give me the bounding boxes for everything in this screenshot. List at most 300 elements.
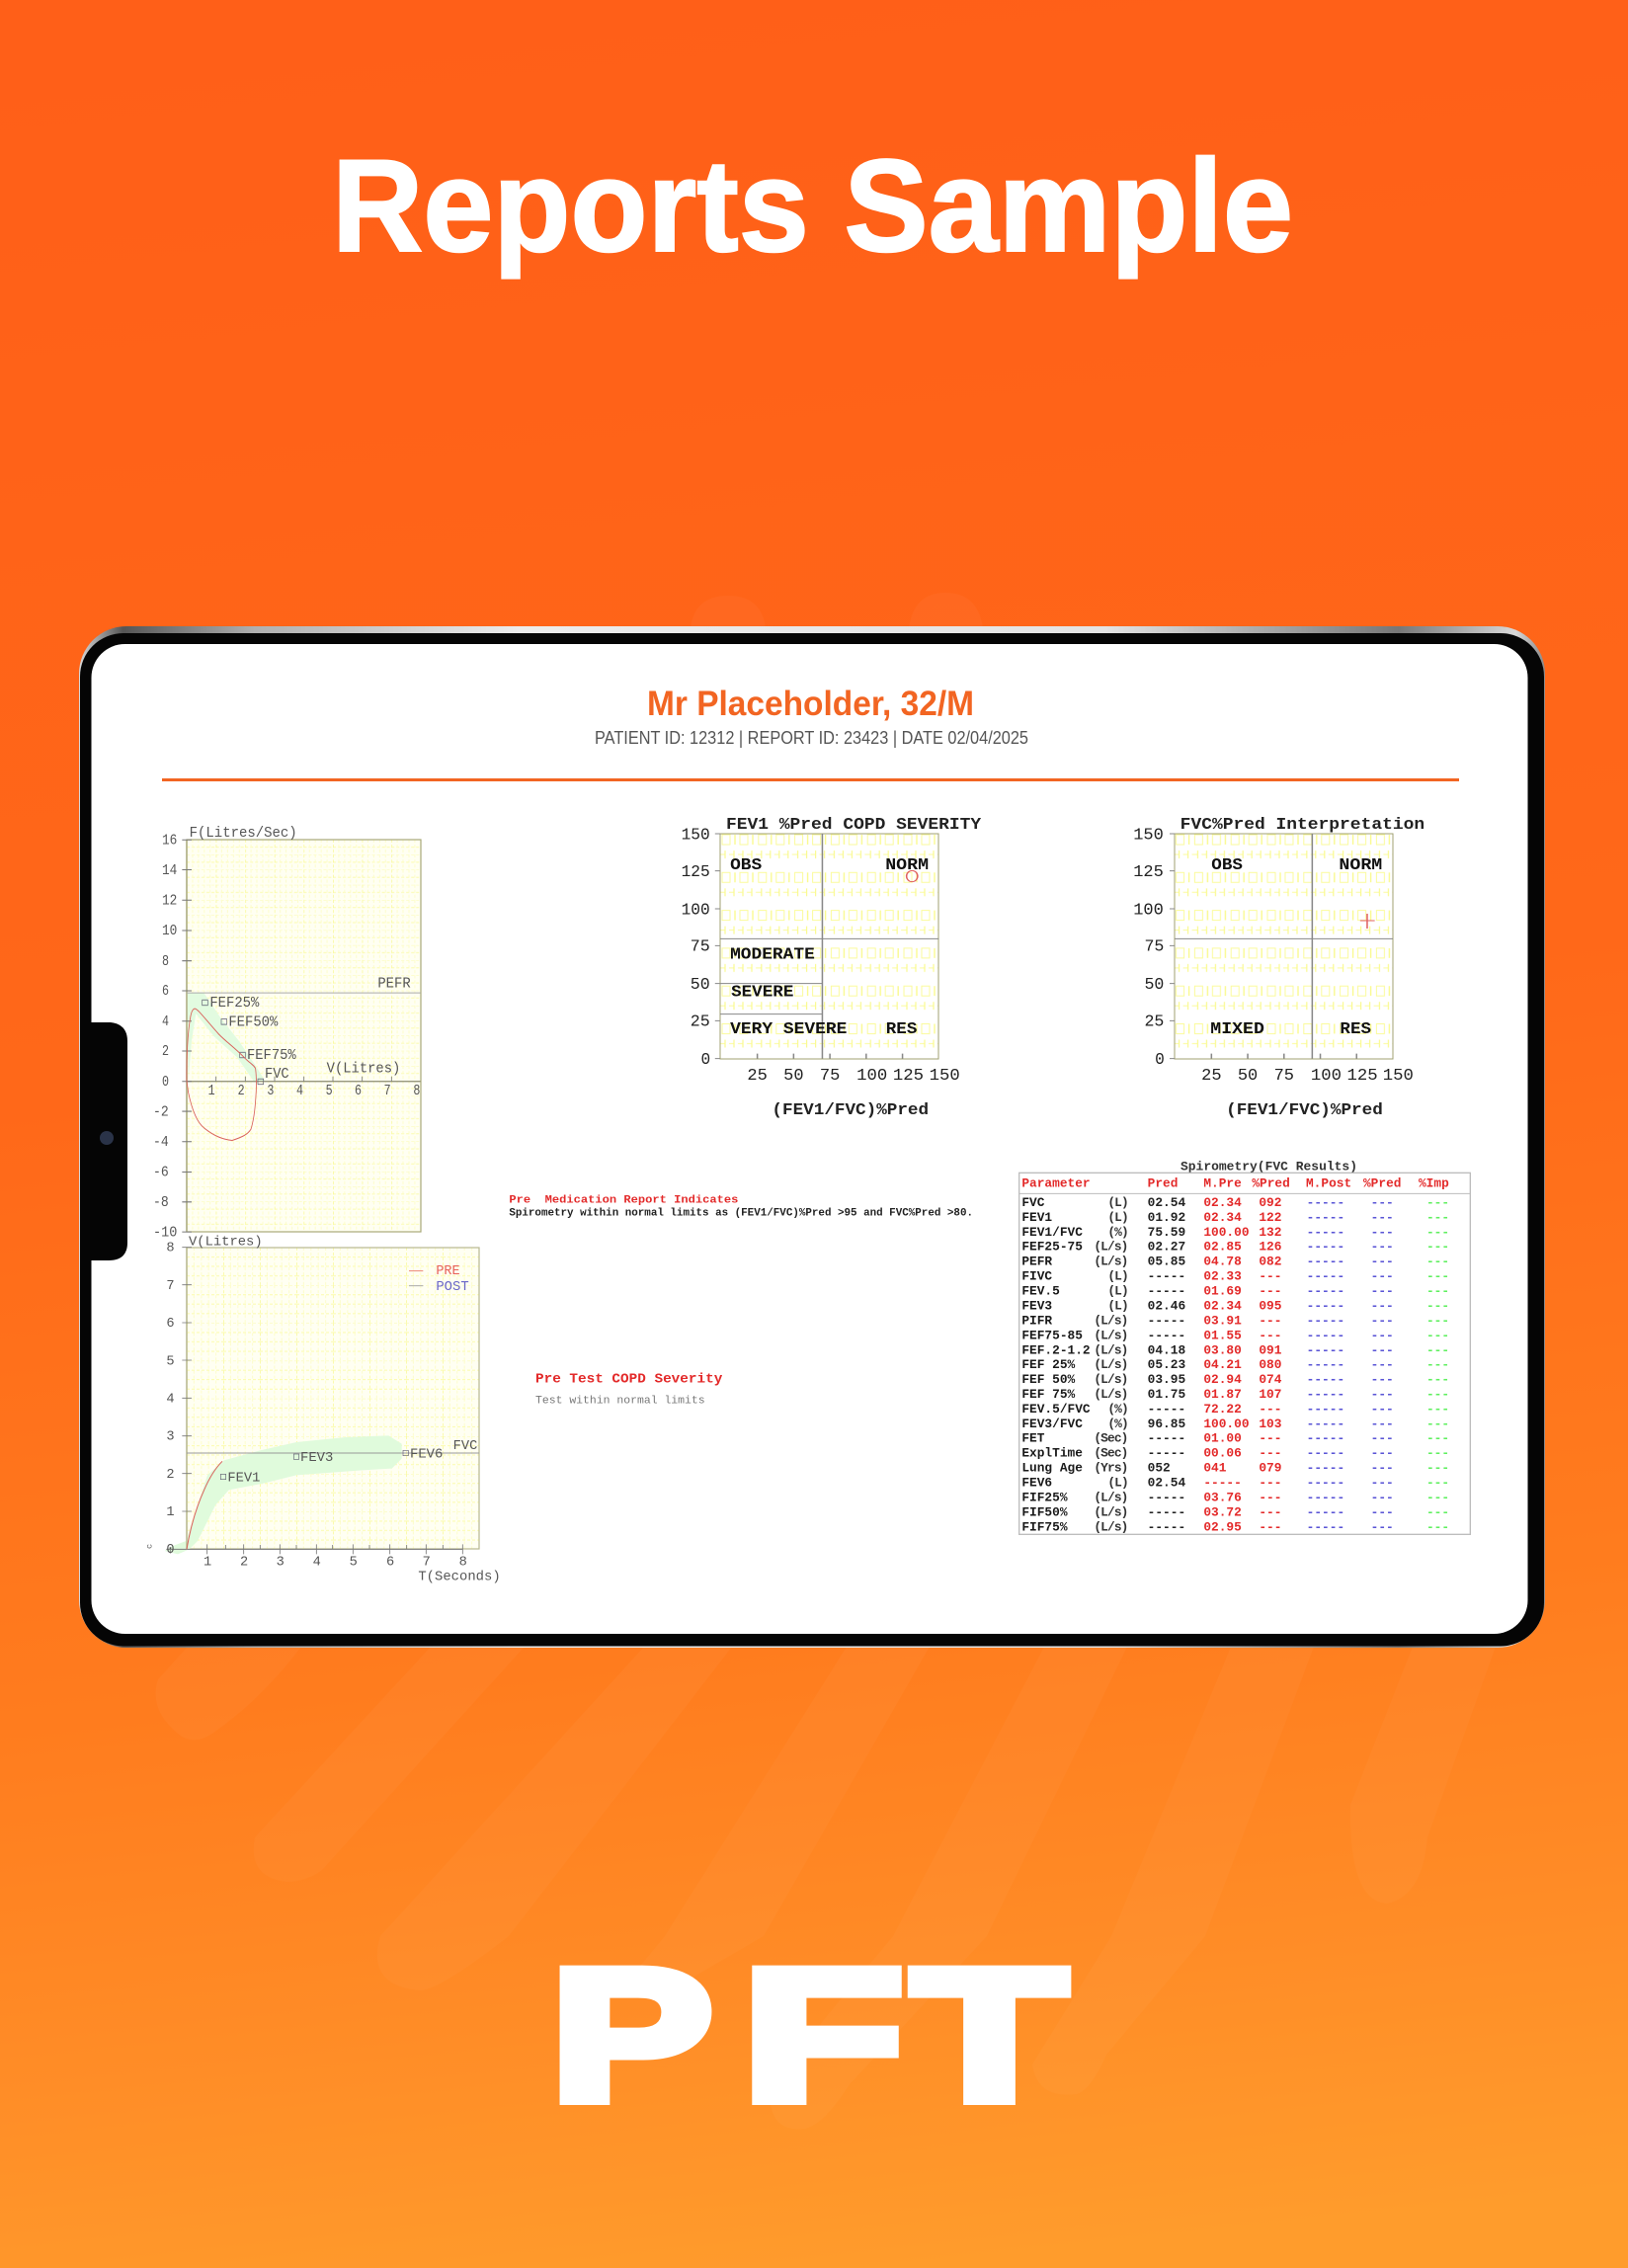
row FIF50%: --- — [1371, 1504, 1394, 1519]
interpretation x-axis title: (FEV1/FVC)%Pred — [1226, 1101, 1383, 1119]
flow x-axis labels: 8 — [413, 1083, 420, 1098]
flow-volume loop curve — [187, 1009, 256, 1141]
stray rotated glyph: c — [144, 1544, 154, 1549]
row FEF 25%: 04.21 — [1203, 1357, 1242, 1372]
interpretation y-axis labels: 50 — [1144, 976, 1164, 994]
row FEF25-75: (L/s) — [1094, 1240, 1128, 1255]
row FIF50%: ----- — [1148, 1504, 1185, 1519]
tablet chrome frame — [79, 626, 1545, 1648]
FEF75 marker: FEF75% — [247, 1047, 296, 1063]
flow y-axis labels: 6 — [162, 983, 169, 1000]
row FET: ----- — [1148, 1431, 1185, 1446]
interpretation region labels — [1210, 856, 1382, 1038]
row ExplTime: ----- — [1307, 1446, 1344, 1461]
row FIF25%: (L/s) — [1094, 1490, 1128, 1504]
volume y-axis labels: 2 — [166, 1468, 175, 1483]
row Lung Age: 079 — [1259, 1461, 1281, 1476]
flow y-axis labels: 16 — [162, 832, 177, 849]
row Lung Age: 041 — [1203, 1461, 1227, 1476]
volume axis title: V(Litres) — [189, 1235, 263, 1250]
severity region labels: OBS — [730, 856, 762, 874]
row FEV1: 02.34 — [1203, 1210, 1242, 1225]
severity region labels: MODERATE — [730, 945, 815, 964]
legend POST: POST — [436, 1280, 469, 1295]
interpretation y-axis labels: 125 — [1133, 863, 1164, 881]
PFT wordmark — [551, 1931, 1066, 2139]
volume y-axis labels: 8 — [166, 1242, 175, 1256]
row FEV.5/FVC: (%) — [1107, 1402, 1128, 1417]
row FEF75-85: ----- — [1307, 1328, 1344, 1342]
row FIF25%: FIF25% — [1021, 1490, 1068, 1504]
row FEF 50%: --- — [1371, 1372, 1394, 1387]
row FIF25%: --- — [1371, 1490, 1394, 1504]
row FEF 50%: FEF 50% — [1021, 1372, 1076, 1387]
severity y-axis labels: 50 — [691, 976, 710, 994]
row FET: (Sec) — [1094, 1431, 1128, 1446]
row FIVC: FIVC — [1021, 1269, 1052, 1284]
row ExplTime: 00.06 — [1203, 1446, 1242, 1461]
row FVC: --- — [1371, 1195, 1394, 1210]
row FIVC: (L) — [1107, 1269, 1128, 1284]
tablet black bezel — [80, 633, 1544, 1646]
flow x-axis labels: 1 — [208, 1083, 215, 1098]
volume y-axis labels: 5 — [166, 1354, 175, 1369]
interpretation y-axis labels: 150 — [1133, 826, 1164, 845]
row FEF 25%: 080 — [1259, 1357, 1281, 1372]
row FET: --- — [1426, 1431, 1449, 1446]
interpretation y-axis labels: 0 — [1155, 1051, 1165, 1069]
row FET: FET — [1021, 1431, 1045, 1446]
severity region labels: SEVERE — [731, 983, 793, 1002]
COPD severity text: Test within normal limits — [535, 1395, 705, 1407]
row FEF75-85: --- — [1259, 1328, 1281, 1342]
row FVC: 02.54 — [1148, 1195, 1185, 1210]
row FET: 01.00 — [1203, 1431, 1242, 1446]
row FEF25-75: --- — [1426, 1240, 1449, 1255]
flow y-axis labels: -10 — [153, 1225, 177, 1241]
row FVC: 02.34 — [1203, 1195, 1242, 1210]
FEF25 marker: FEF25% — [209, 995, 259, 1011]
severity y-axis labels: 25 — [691, 1013, 710, 1031]
row FIF75%: (L/s) — [1094, 1519, 1128, 1534]
row FIVC: --- — [1371, 1269, 1394, 1284]
volume y-axis labels: 1 — [166, 1505, 175, 1520]
severity y-axis labels: 75 — [691, 938, 710, 956]
row FEV1/FVC: --- — [1426, 1225, 1449, 1240]
flow y-axis labels: 10 — [162, 923, 177, 939]
title: Reports Sample — [332, 133, 1293, 280]
legend PRE: PRE — [436, 1264, 460, 1279]
time x-axis labels — [204, 1556, 467, 1571]
row FEV.5/FVC: --- — [1426, 1402, 1449, 1417]
table header: Parameter — [1021, 1176, 1091, 1191]
row FEV3/FVC: --- — [1426, 1417, 1449, 1431]
row PIFR: PIFR — [1021, 1313, 1052, 1328]
row FET: --- — [1371, 1431, 1394, 1446]
row FEV.5/FVC: FEV.5/FVC — [1021, 1402, 1091, 1417]
flow y-axis labels: 8 — [162, 953, 169, 969]
severity x-axis labels: 100 — [856, 1067, 887, 1085]
row FIF25%: 03.76 — [1203, 1490, 1242, 1504]
flow x-axis labels: 2 — [238, 1083, 245, 1098]
row FEF75-85: FEF75-85 — [1021, 1328, 1083, 1342]
row FEV.5/FVC: --- — [1371, 1402, 1394, 1417]
row PEFR: 05.85 — [1148, 1255, 1185, 1269]
row FEF 75%: ----- — [1307, 1387, 1344, 1402]
row FEF 75%: 01.87 — [1203, 1387, 1242, 1402]
row FEF.2-1.2: --- — [1371, 1342, 1394, 1357]
row PEFR: ----- — [1307, 1255, 1344, 1269]
interpretation labels and markers — [1133, 816, 1424, 1119]
row FEF 75%: --- — [1371, 1387, 1394, 1402]
row FIF25%: --- — [1426, 1490, 1449, 1504]
row FEV3/FVC: 103 — [1259, 1417, 1282, 1431]
row FEF 50%: (L/s) — [1094, 1372, 1128, 1387]
report header rule — [162, 778, 1459, 781]
table header: M.Post — [1306, 1176, 1351, 1191]
flow axis title: F(Litres/Sec) — [190, 825, 297, 841]
row FVC: FVC — [1021, 1195, 1045, 1210]
row FEV.5: ----- — [1307, 1284, 1344, 1299]
interpretation y-axis labels: 75 — [1144, 938, 1164, 956]
severity region labels — [730, 856, 929, 1038]
flow x-axis labels: 4 — [296, 1083, 303, 1098]
row FEF 25%: 05.23 — [1148, 1357, 1185, 1372]
row PIFR: ----- — [1148, 1313, 1185, 1328]
row FEV3/FVC: 100.00 — [1203, 1417, 1250, 1431]
row FIF75%: FIF75% — [1021, 1519, 1068, 1534]
row FEF.2-1.2: (L/s) — [1094, 1342, 1128, 1357]
row FEF25-75: FEF25-75 — [1021, 1240, 1083, 1255]
interpretation region labels: NORM — [1339, 856, 1382, 874]
severity y-axis labels: 100 — [682, 901, 710, 920]
row FEV3: FEV3 — [1021, 1298, 1052, 1313]
row FEV.5/FVC: 72.22 — [1203, 1402, 1242, 1417]
row FIF25%: --- — [1259, 1490, 1281, 1504]
severity region labels: NORM — [885, 856, 929, 874]
interpretation x-axis labels: 75 — [1274, 1067, 1294, 1085]
severity x-axis labels: 50 — [783, 1067, 804, 1085]
row ExplTime: ----- — [1148, 1446, 1185, 1461]
interpretation region labels: MIXED — [1210, 1020, 1264, 1038]
medication report heading: Pre Medication Report Indicates — [509, 1194, 738, 1206]
row Lung Age: 052 — [1148, 1461, 1171, 1476]
table header: Pred — [1148, 1176, 1178, 1191]
row FIF50%: --- — [1426, 1504, 1449, 1519]
row FEF 25%: FEF 25% — [1021, 1357, 1076, 1372]
row FEV.5: --- — [1259, 1284, 1281, 1299]
table header — [1019, 1176, 1470, 1193]
row PEFR: --- — [1371, 1255, 1394, 1269]
row Lung Age: ----- — [1307, 1461, 1344, 1476]
row FEV1: (L) — [1107, 1210, 1128, 1225]
table caption: Spirometry(FVC Results) — [1180, 1160, 1357, 1174]
row FEV.5: ----- — [1148, 1284, 1185, 1299]
row FVC: 092 — [1259, 1195, 1281, 1210]
row FEF75-85: (L/s) — [1094, 1328, 1128, 1342]
predicted band — [187, 994, 265, 1081]
flow x-axis labels: 7 — [384, 1083, 391, 1098]
row FIF75%: ----- — [1148, 1519, 1185, 1534]
volume y-axis labels — [166, 1242, 175, 1558]
row FEV6: --- — [1371, 1476, 1394, 1491]
row FEF.2-1.2: ----- — [1307, 1342, 1344, 1357]
row PIFR: --- — [1371, 1313, 1394, 1328]
flow y-axis labels: -2 — [153, 1103, 169, 1120]
interpretation title: FVC%Pred Interpretation — [1180, 816, 1424, 834]
row FIVC: 02.33 — [1203, 1269, 1242, 1284]
flow y-axis labels: 14 — [162, 862, 177, 879]
row FEF 25%: --- — [1371, 1357, 1394, 1372]
FVC marker — [258, 1066, 289, 1085]
row FVC: ----- — [1307, 1195, 1344, 1210]
PEFR label: PEFR — [377, 975, 411, 992]
severity x-axis labels: 25 — [747, 1067, 768, 1085]
interpretation x-axis labels: 25 — [1201, 1067, 1222, 1085]
severity x-axis labels: 150 — [930, 1067, 960, 1085]
row FEV3/FVC: --- — [1371, 1417, 1394, 1431]
time axes and FVC reference line — [185, 1248, 189, 1549]
tablet screen — [91, 644, 1527, 1634]
background swoosh strokes — [156, 593, 1496, 2129]
row FIF50%: 03.72 — [1203, 1504, 1242, 1519]
row FEV.5: --- — [1426, 1284, 1449, 1299]
row FEF75-85: --- — [1371, 1328, 1394, 1342]
row PIFR: ----- — [1307, 1313, 1344, 1328]
row FEV.5: FEV.5 — [1021, 1284, 1060, 1299]
row FEV6: FEV6 — [1021, 1476, 1052, 1491]
row FEV3: --- — [1371, 1298, 1394, 1313]
row FEV.5/FVC: --- — [1259, 1402, 1281, 1417]
severity y-axis labels — [682, 826, 710, 1069]
flow y-axis labels: -4 — [153, 1134, 169, 1150]
table header: %Pred — [1363, 1176, 1401, 1191]
row FEV1: 122 — [1259, 1210, 1281, 1225]
row FIF75%: --- — [1371, 1519, 1394, 1534]
interpretation x-axis labels: 125 — [1347, 1067, 1378, 1085]
COPD severity heading: Pre Test COPD Severity — [535, 1371, 723, 1387]
volume y-axis labels: 6 — [166, 1317, 175, 1332]
row FIF75%: ----- — [1307, 1519, 1344, 1534]
PFT wordmark: P — [551, 1931, 712, 2139]
table frame — [1019, 1173, 1470, 1534]
FEV6 marker: FEV6 — [410, 1447, 443, 1462]
row FEV3: 02.34 — [1203, 1298, 1242, 1313]
legend POST — [409, 1280, 469, 1295]
severity x-axis labels: 125 — [893, 1067, 924, 1085]
legend PRE — [409, 1264, 460, 1279]
FEV1 marker: FEV1 — [227, 1471, 260, 1486]
chart: FVC%Pred interpretation — [1133, 816, 1424, 1119]
row FEV3/FVC: ----- — [1307, 1417, 1344, 1431]
severity y-axis labels: 125 — [682, 863, 710, 881]
volume-time labels and curve — [144, 1235, 501, 1584]
row FEV.5: 01.69 — [1203, 1284, 1242, 1299]
row FIF75%: 02.95 — [1203, 1519, 1242, 1534]
row FIF50%: (L/s) — [1094, 1504, 1128, 1519]
flow y-axis labels: 2 — [162, 1043, 169, 1060]
table header: M.Pre — [1203, 1176, 1242, 1191]
FVC marker: FVC — [265, 1066, 289, 1082]
report patient details: PATIENT ID: 12312 | REPORT ID: 23423 | DATE 02/04/2025 — [595, 728, 1028, 748]
severity dividers — [715, 834, 938, 1059]
row FEF.2-1.2: FEF.2-1.2 — [1021, 1342, 1091, 1357]
interpretation marker — [1360, 914, 1375, 929]
volume y-axis labels: 3 — [166, 1430, 175, 1445]
row FEV1: 01.92 — [1148, 1210, 1185, 1225]
severity labels and markers — [682, 816, 981, 1119]
row FEV1/FVC: ----- — [1307, 1225, 1344, 1240]
row FEF 75%: 107 — [1259, 1387, 1281, 1402]
row FIVC: ----- — [1307, 1269, 1344, 1284]
row FEV6: (L) — [1107, 1476, 1128, 1491]
report patient name: Mr Placeholder, 32/M — [647, 685, 974, 723]
flow y-axis labels: -6 — [153, 1165, 169, 1180]
row FIF50%: FIF50% — [1021, 1504, 1068, 1519]
row FEF 25%: ----- — [1307, 1357, 1344, 1372]
row FEV3: ----- — [1307, 1298, 1344, 1313]
row ExplTime: --- — [1426, 1446, 1449, 1461]
row ExplTime: ExplTime — [1021, 1446, 1083, 1461]
time x-axis labels: 8 — [459, 1556, 467, 1571]
row FEV6: 02.54 — [1148, 1476, 1185, 1491]
row FEF 50%: 03.95 — [1148, 1372, 1185, 1387]
row FEV1/FVC: FEV1/FVC — [1021, 1225, 1083, 1240]
row PIFR: (L/s) — [1094, 1313, 1128, 1328]
row FIF50%: ----- — [1307, 1504, 1344, 1519]
row FEF.2-1.2: --- — [1426, 1342, 1449, 1357]
row PEFR: 082 — [1259, 1255, 1281, 1269]
flow x-axis labels: 5 — [326, 1083, 333, 1098]
row FEV.5/FVC: ----- — [1148, 1402, 1185, 1417]
row PEFR: 04.78 — [1203, 1255, 1242, 1269]
volume-time plot area — [187, 1248, 479, 1549]
volume-time curve — [187, 1461, 222, 1549]
row FEV1/FVC: --- — [1371, 1225, 1394, 1240]
row FIF75%: --- — [1426, 1519, 1449, 1534]
severity marker — [907, 870, 918, 882]
row FEV1/FVC: 75.59 — [1148, 1225, 1185, 1240]
row FEF 75%: (L/s) — [1094, 1387, 1128, 1402]
row FEF 75%: --- — [1426, 1387, 1449, 1402]
row PEFR: (L/s) — [1094, 1255, 1128, 1269]
severity x-axis labels — [747, 1067, 960, 1085]
row PEFR: PEFR — [1021, 1255, 1052, 1269]
severity y-axis labels: 150 — [682, 826, 710, 845]
row ExplTime: (Sec) — [1094, 1446, 1128, 1461]
row FEF 25%: (L/s) — [1094, 1357, 1128, 1372]
row FEF 75%: 01.75 — [1148, 1387, 1185, 1402]
row FEF25-75: ----- — [1307, 1240, 1344, 1255]
row PIFR: --- — [1426, 1313, 1449, 1328]
row FEF 50%: 074 — [1259, 1372, 1282, 1387]
row FEF75-85: --- — [1426, 1328, 1449, 1342]
time x-axis labels: 2 — [240, 1556, 248, 1571]
row FEV1: --- — [1426, 1210, 1449, 1225]
flow-volume labels and curve — [153, 825, 421, 1241]
interpretation y-axis labels — [1133, 826, 1165, 1069]
row FEV.5/FVC: ----- — [1307, 1402, 1344, 1417]
table header: %Imp — [1419, 1176, 1449, 1191]
row Lung Age: --- — [1371, 1461, 1394, 1476]
flow y-axis labels: 12 — [162, 892, 177, 909]
time x-axis labels: 3 — [277, 1556, 285, 1571]
row FEF 75%: FEF 75% — [1021, 1387, 1076, 1402]
interpretation y-axis labels: 25 — [1144, 1013, 1164, 1031]
row FIVC: --- — [1259, 1269, 1281, 1284]
flow y-axis labels: -8 — [153, 1194, 169, 1210]
chart: flow-volume loop — [153, 825, 421, 1241]
predicted band — [165, 1435, 402, 1554]
row PIFR: 03.91 — [1203, 1313, 1242, 1328]
row FEV3: (L) — [1107, 1298, 1128, 1313]
row ExplTime: --- — [1371, 1446, 1394, 1461]
row FEV1/FVC: (%) — [1107, 1225, 1128, 1240]
row FIF25%: ----- — [1148, 1490, 1185, 1504]
row FET: ----- — [1307, 1431, 1344, 1446]
row FEF75-85: ----- — [1148, 1328, 1185, 1342]
flow y-axis labels — [153, 832, 177, 1241]
time x-axis labels: 6 — [386, 1556, 394, 1571]
time x-axis labels: 1 — [204, 1556, 211, 1571]
row FEV6: --- — [1426, 1476, 1449, 1491]
row FIVC: --- — [1426, 1269, 1449, 1284]
severity x-axis title: (FEV1/FVC)%Pred — [772, 1101, 929, 1119]
row FEV3/FVC: FEV3/FVC — [1021, 1417, 1083, 1431]
flow x-axis labels — [208, 1083, 420, 1098]
severity region labels: VERY SEVERE — [730, 1020, 848, 1038]
volume y-axis labels: 0 — [166, 1543, 175, 1558]
row ExplTime: --- — [1259, 1446, 1281, 1461]
tablet camera notch — [89, 1022, 127, 1260]
flow-volume plot area — [187, 840, 421, 1232]
interpretation y-axis labels: 100 — [1133, 901, 1164, 920]
row FEV1/FVC: 132 — [1259, 1225, 1281, 1240]
row FET: --- — [1259, 1431, 1281, 1446]
time x-axis labels: 5 — [350, 1556, 358, 1571]
table header: %Pred — [1252, 1176, 1290, 1191]
row Lung Age: Lung Age — [1021, 1461, 1083, 1476]
interpretation x-axis labels: 50 — [1238, 1067, 1258, 1085]
row FVC: (L) — [1107, 1195, 1128, 1210]
medication report text: Spirometry within normal limits as (FEV1/FVC)%Pred >95 and FVC%Pred >80. — [509, 1208, 973, 1220]
row FEF.2-1.2: 04.18 — [1148, 1342, 1185, 1357]
FVC label: FVC — [453, 1439, 477, 1454]
time x-axis labels: 7 — [423, 1556, 431, 1571]
row FEF 25%: --- — [1426, 1357, 1449, 1372]
row FEF 50%: 02.94 — [1203, 1372, 1242, 1387]
row FEV1: ----- — [1307, 1210, 1344, 1225]
interpretation dividers — [1170, 834, 1393, 1059]
row FIVC: ----- — [1148, 1269, 1185, 1284]
FEV3 marker: FEV3 — [300, 1451, 333, 1466]
tablet camera — [100, 1131, 114, 1145]
severity x-axis labels: 75 — [820, 1067, 840, 1085]
row FIF50%: --- — [1259, 1504, 1281, 1519]
row FEF25-75: 02.85 — [1203, 1240, 1242, 1255]
row FIF75%: --- — [1259, 1519, 1281, 1534]
flow x-axis labels: 3 — [267, 1083, 274, 1098]
severity region labels: RES — [886, 1020, 917, 1038]
row FEV6: ----- — [1203, 1476, 1242, 1491]
row FEV1: FEV1 — [1021, 1210, 1052, 1225]
chart: volume-time — [144, 1235, 501, 1584]
interpretation plot area — [1175, 834, 1393, 1059]
interpretation x-axis labels: 150 — [1383, 1067, 1414, 1085]
volume y-axis labels: 4 — [166, 1393, 175, 1408]
row FEF25-75: 126 — [1259, 1240, 1281, 1255]
row FEV3/FVC: (%) — [1107, 1417, 1128, 1431]
